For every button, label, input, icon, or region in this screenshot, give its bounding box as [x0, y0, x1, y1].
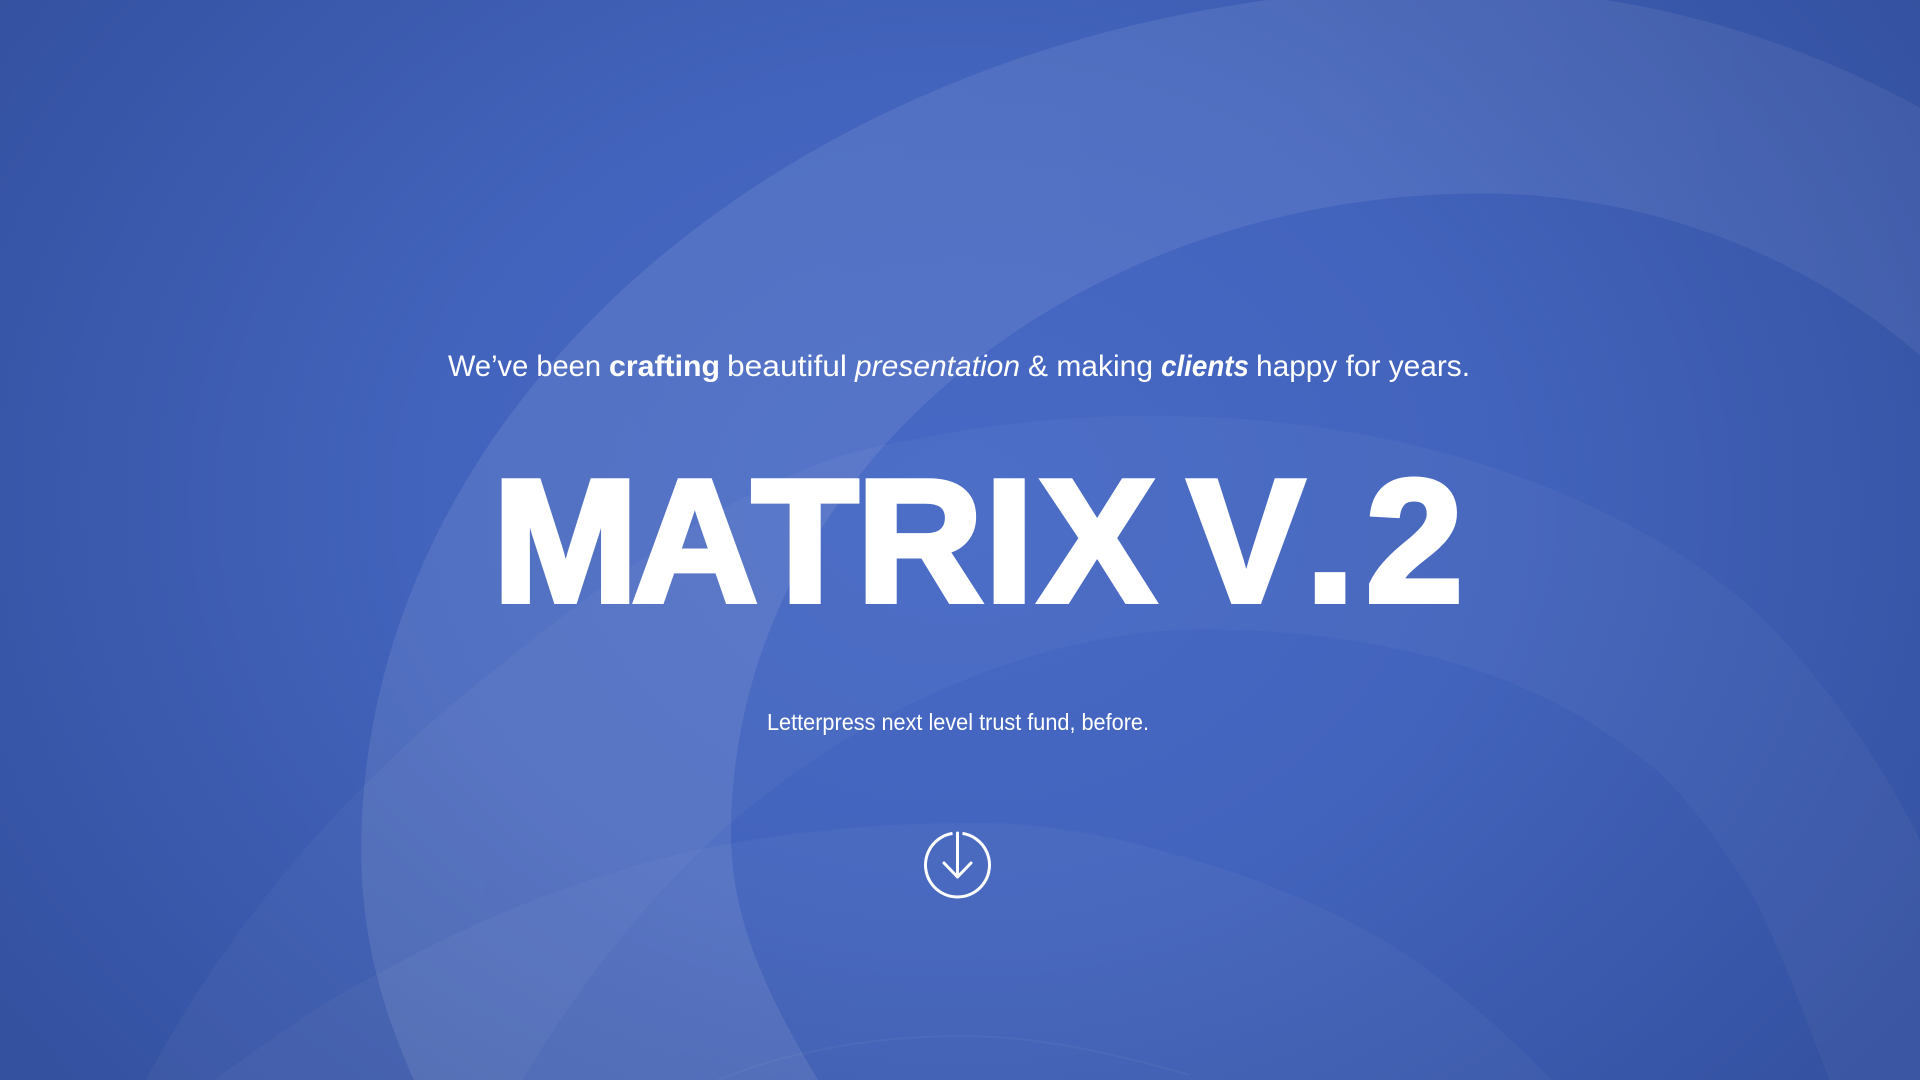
tagline: We’ve been — [448, 350, 601, 383]
tagline: presentation — [854, 350, 1020, 383]
subtitle: Letterpress next level trust fund, before. — [767, 709, 1149, 735]
icon: down arrow in circle — [925, 833, 990, 897]
tagline: crafting — [609, 350, 720, 383]
tagline — [448, 350, 1470, 383]
tagline: beautiful — [727, 350, 847, 383]
tagline: happy for years. — [1256, 350, 1470, 383]
title: MATRIX V.2 — [493, 443, 1463, 638]
tagline: clients — [1161, 350, 1249, 383]
tagline: & making — [1028, 350, 1153, 383]
